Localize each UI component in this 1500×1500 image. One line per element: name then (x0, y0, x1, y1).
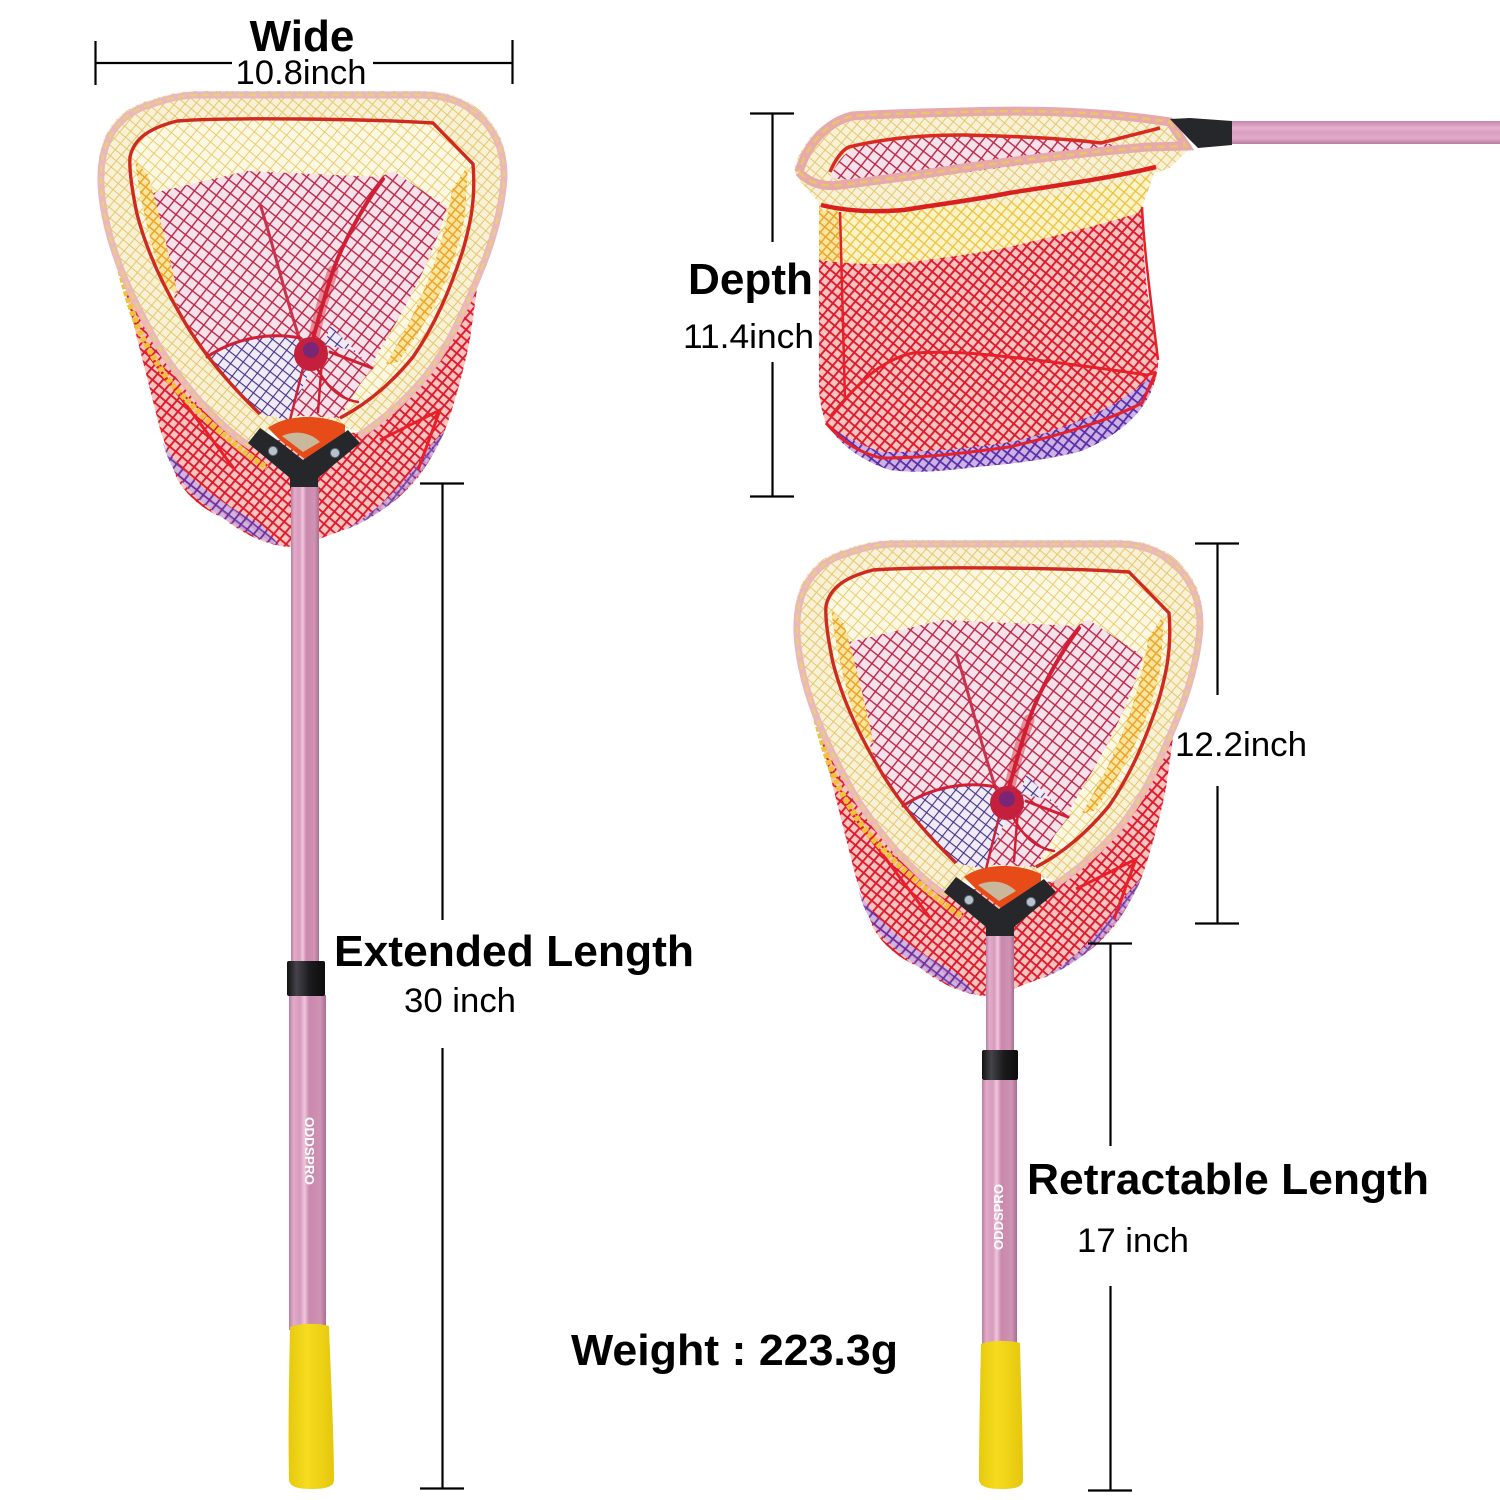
dimension: extended length (334, 483, 694, 1488)
retracted pole (979, 936, 1023, 1489)
dimension: wide (95, 12, 512, 92)
pole (1232, 121, 1500, 144)
brand mark: ODDSPRO (991, 1184, 1006, 1250)
bag (819, 150, 1158, 472)
rim ring (821, 167, 1156, 211)
net: extended view (98, 91, 507, 1489)
retractable arrow (1088, 943, 1132, 1490)
height arrow (1195, 543, 1239, 924)
heading: extended length: Extended Length (334, 927, 694, 976)
value: depth: 11.4inch (683, 318, 814, 356)
net: retracted view (794, 540, 1203, 1489)
yellow section (819, 167, 1156, 264)
rim mesh (794, 111, 1192, 209)
net: side view (794, 111, 1500, 472)
brand mark: ODDSPRO (302, 1117, 316, 1185)
yellow grip (979, 1341, 1023, 1489)
heading: retractable length: Retractable Length (1027, 1155, 1429, 1204)
collar (287, 961, 325, 996)
value: wide: 10.8inch (236, 54, 366, 92)
purple base (826, 375, 1153, 472)
wide arrow (95, 40, 512, 85)
dimension: retractable length (1027, 943, 1429, 1490)
heading: wide: Wide (250, 12, 354, 61)
yellow grip (289, 1324, 334, 1489)
depth arrow (750, 113, 794, 496)
dimension: depth (683, 113, 814, 496)
collar (982, 1050, 1018, 1080)
weight label: Weight : 223.3g (571, 1326, 898, 1375)
connector (1170, 118, 1232, 148)
dimension: net height (1175, 543, 1307, 924)
value: extended length: 30 inch (404, 982, 516, 1020)
bottom ring (826, 352, 1156, 458)
heading: depth: Depth (688, 255, 813, 304)
value: retractable length: 17 inch (1077, 1222, 1189, 1260)
value: net height: 12.2inch (1175, 726, 1307, 764)
extended pole (287, 487, 334, 1489)
extended arrow (420, 483, 464, 1488)
